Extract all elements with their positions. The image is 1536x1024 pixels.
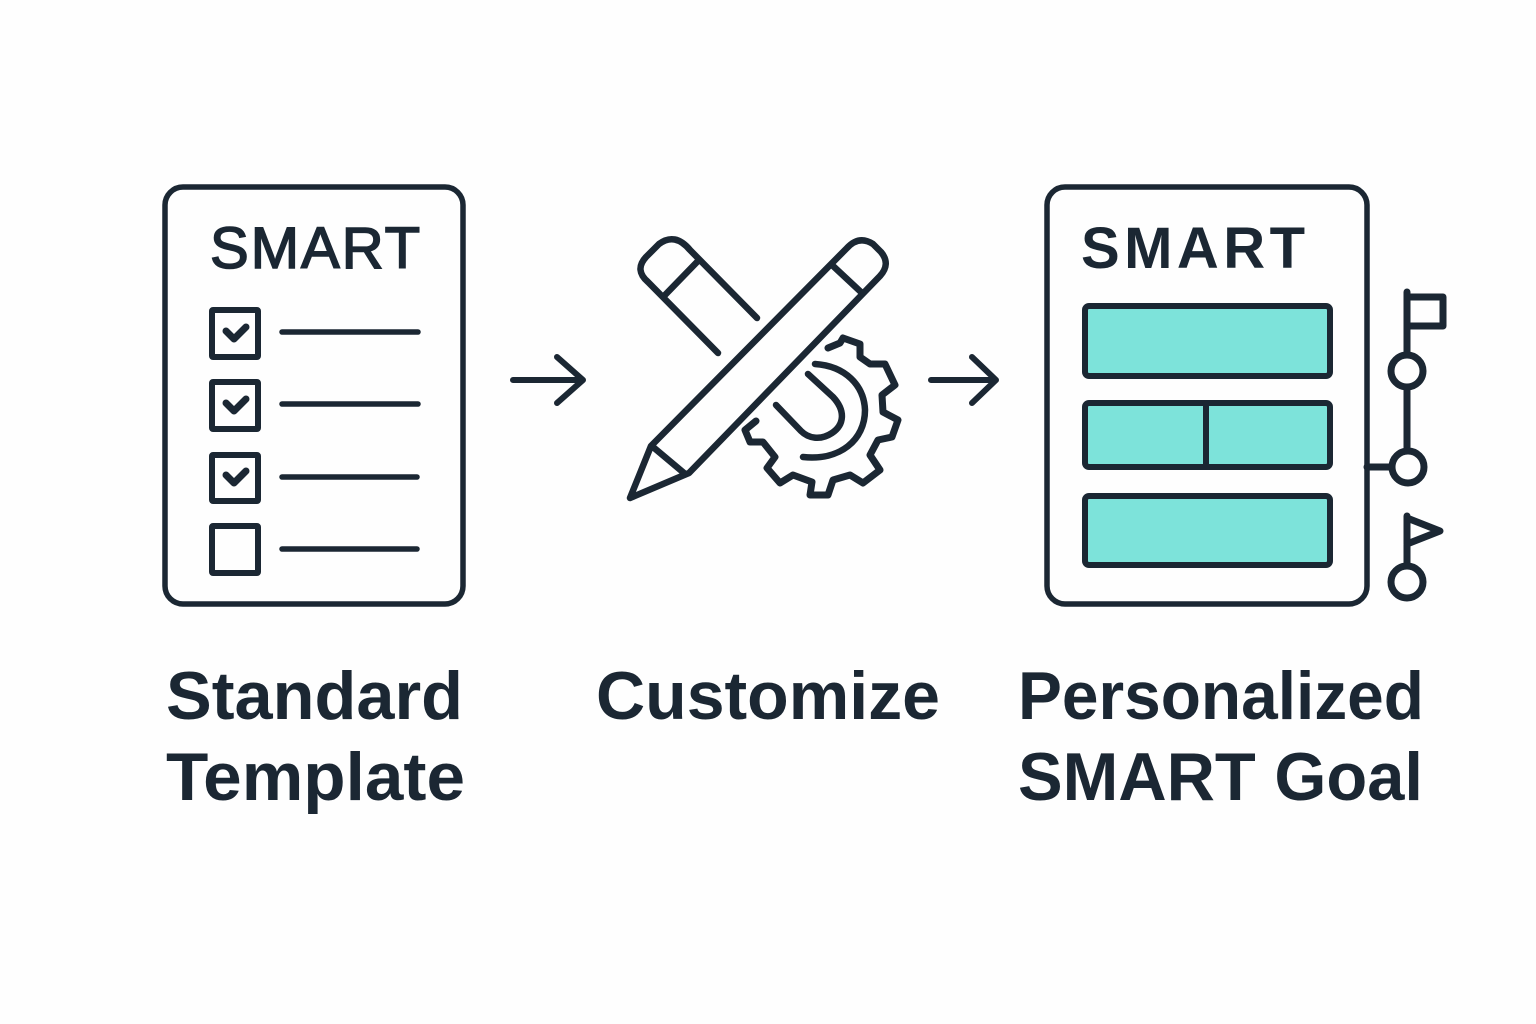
teal bar 3 <box>1085 496 1330 565</box>
label: Personalized SMART Goal <box>1018 658 1424 815</box>
arrow: customize to personalized <box>931 357 996 403</box>
checklist item 4 <box>212 526 417 573</box>
label: Personalized SMART Goal: Personalized <box>1018 658 1424 734</box>
panel: personalized SMART document <box>1047 187 1367 604</box>
icon: gear <box>745 338 898 495</box>
milestone circle 2 <box>1392 451 1424 483</box>
milestone circle 3 <box>1391 566 1423 598</box>
icon: crossed pencils and gear <box>630 239 898 498</box>
panel: standard template document <box>165 187 463 604</box>
heading: SMART: SMART <box>1081 216 1305 281</box>
document outline <box>165 187 463 604</box>
icon: gear inner arcs <box>776 364 865 457</box>
milestone timeline with flags <box>1367 292 1443 598</box>
checklist <box>212 310 418 573</box>
teal bar 1 <box>1085 306 1330 376</box>
checklist item 1 <box>212 310 418 357</box>
label: Standard Template: Standard <box>166 658 463 734</box>
milestone circle 1 <box>1391 355 1423 387</box>
arrow: template to customize <box>513 357 583 403</box>
icon: back pencil <box>640 239 757 353</box>
heading: SMART: SMART <box>210 216 420 281</box>
icon: top square flag <box>1407 292 1443 354</box>
icon: triangle flag <box>1407 516 1440 566</box>
label: Personalized SMART Goal: SMART Goal <box>1018 739 1423 815</box>
checklist item 2 <box>212 382 418 429</box>
connector <box>1367 387 1407 467</box>
teal split bar <box>1085 403 1330 467</box>
document outline <box>1047 187 1367 604</box>
icon: front pencil <box>630 240 886 498</box>
checklist item 3 <box>212 455 417 501</box>
label: Customize: Customize <box>596 658 940 734</box>
label: Standard Template <box>166 658 465 815</box>
label: Standard Template: Template <box>166 739 465 815</box>
